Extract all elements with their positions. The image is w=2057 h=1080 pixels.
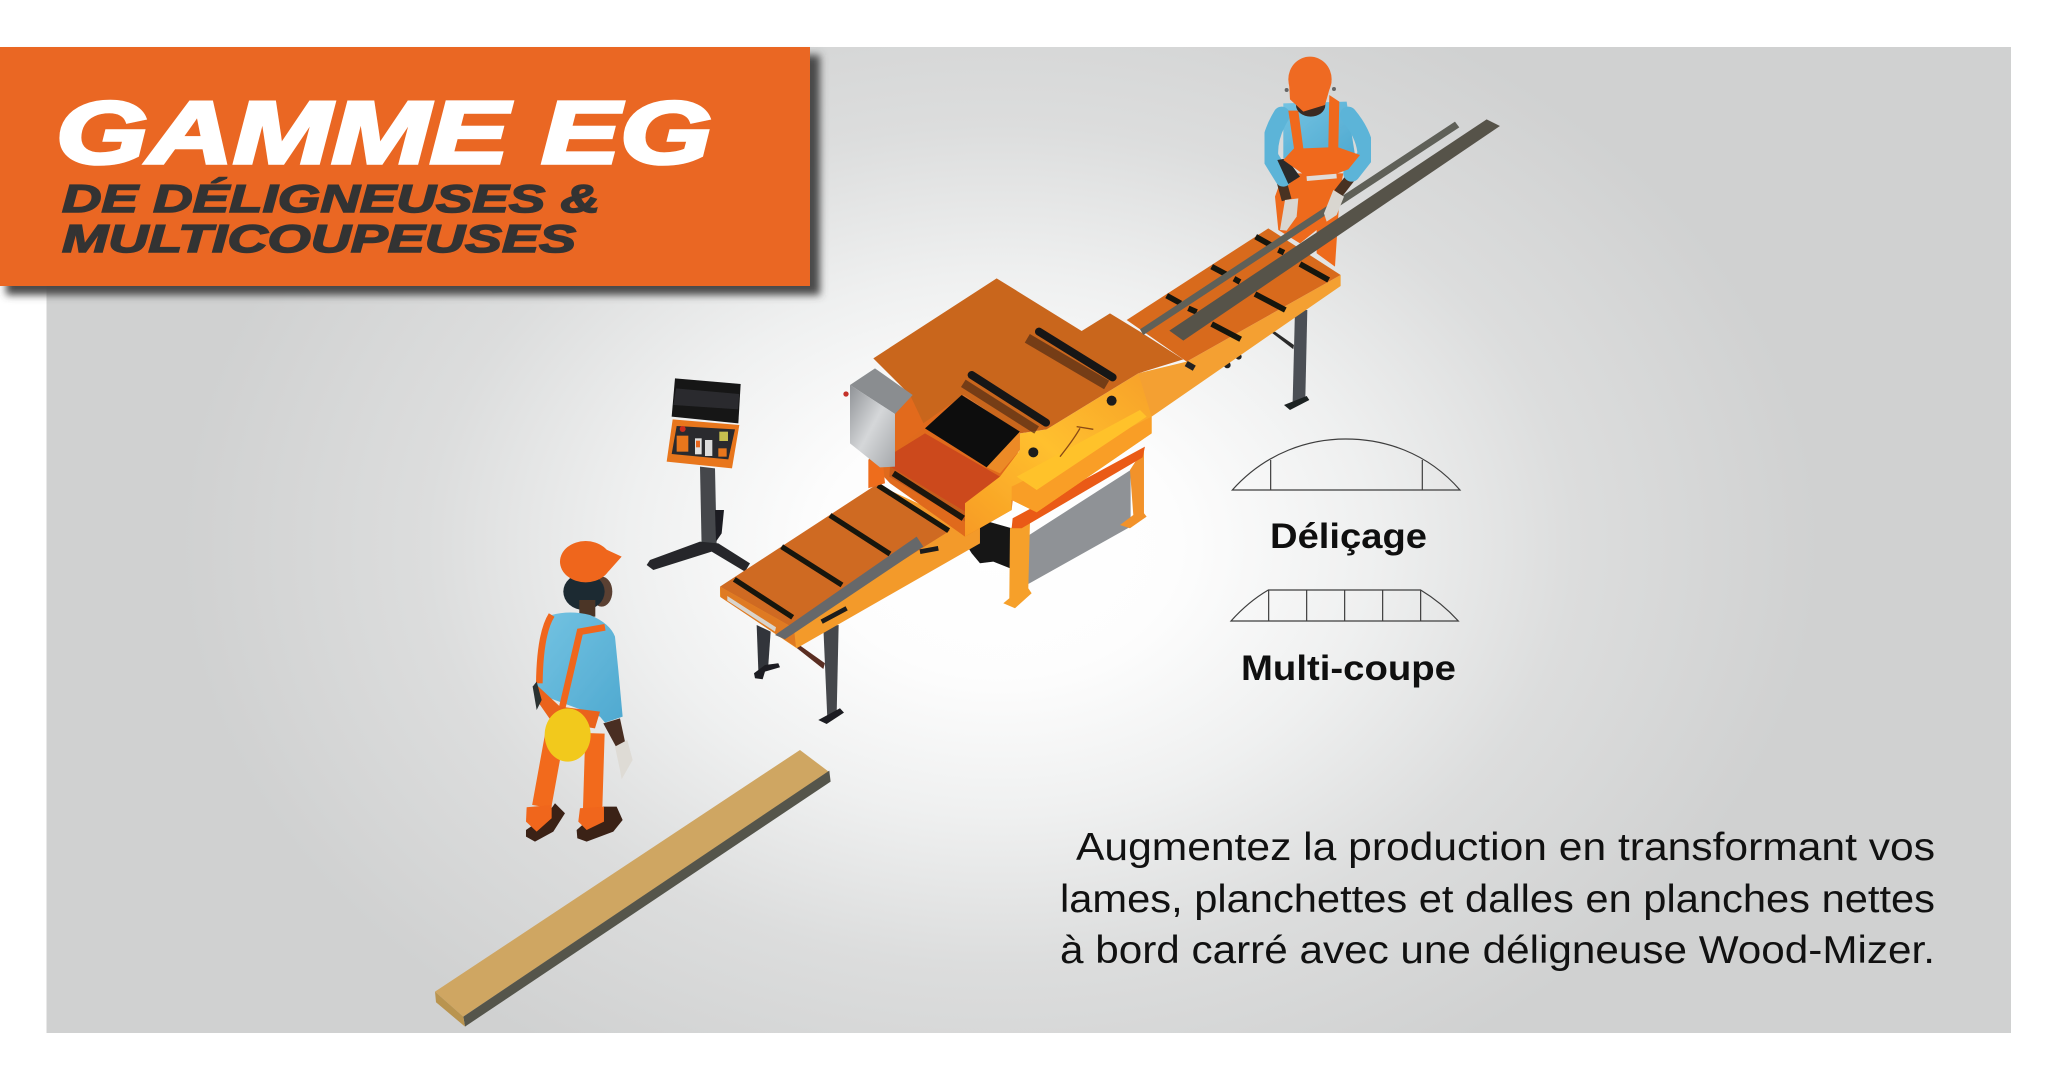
drawing: worker gloves [1280, 190, 1344, 231]
drawing: saw machine body [843, 278, 1183, 537]
drawing: worker standing with yellow helmet [526, 541, 633, 842]
text block: description: lames, planchettes et dalles en planches nettes [1060, 878, 1935, 921]
drawing: waste board on outfeed [775, 537, 923, 639]
drawing: blue torso [1283, 102, 1355, 158]
drawing: dark belt [1277, 158, 1300, 184]
drawing: orange cap [560, 541, 622, 582]
drawing: worker legs at infeed [1275, 173, 1343, 267]
drawing: worker feeding boards [1270, 57, 1366, 200]
drawing: orange bib [1283, 95, 1360, 177]
drawing: infeed table deck [1127, 228, 1341, 417]
subheading: line one: DE DÉLIGNEUSES & [62, 177, 600, 221]
heading: GAMME EG: GAMME EG [56, 83, 712, 182]
text block: description: à bord carré avec une déligneuse Wood-Mizer. [1060, 929, 1935, 972]
drawing: chute opening [890, 395, 925, 455]
drawing: suspenders [539, 615, 605, 710]
drawing: blue shirt [537, 612, 623, 723]
drawing: yellow hard hat [545, 708, 591, 762]
drawing: red beam [1012, 447, 1145, 528]
label: Multi-coupe: Multi-coupe [1241, 649, 1456, 688]
drawing: outfeed table legs [754, 625, 844, 724]
drawing: boards being fed [1140, 119, 1500, 341]
drawing: hand and glove [603, 718, 625, 747]
drawing: belt [535, 683, 600, 728]
diagram: multi-rip cut [1231, 590, 1458, 621]
drawing: orange backing [868, 395, 1020, 537]
drawing: lower left post [868, 460, 885, 488]
drawing: machine base cabinet and motor [963, 447, 1147, 608]
drawing: bolts [1028, 396, 1117, 457]
drawing: legs [542, 733, 595, 808]
drawing: forearms [1282, 178, 1350, 200]
drawing: front post [1003, 522, 1032, 608]
drawing: lower feed roller [963, 383, 1037, 430]
drawing: silver electrical box [843, 368, 913, 467]
subheading: line two: MULTICOUPEUSES [62, 218, 576, 261]
drawing: infeed table legs [1224, 310, 1309, 410]
drawing: grey door panel [1027, 470, 1131, 584]
label: Déliçage: Déliçage [1270, 517, 1427, 556]
drawing: plank on floor [435, 750, 831, 1027]
drawing: yellow side frame [965, 373, 1152, 537]
drawing: control console on stand [647, 378, 750, 572]
drawing: hair and head [591, 577, 612, 607]
title banner [0, 47, 810, 286]
drawing: top plate [873, 278, 1183, 433]
drawing: cut lines on blade cover [1060, 427, 1093, 457]
drawing: upper feed roller [1027, 338, 1107, 385]
diagram: edging cut [1232, 439, 1460, 490]
icon: motor [963, 522, 1012, 568]
drawing: head [1296, 93, 1325, 117]
drawing: outfeed table deck [720, 484, 980, 648]
drawing: lower red chamber [890, 433, 1000, 512]
banner shadow [6, 55, 820, 295]
drawing: orange cap [1288, 57, 1332, 112]
text block: description: Augmentez la production en transformant vos [1076, 826, 1935, 869]
drawing: rear post [1120, 448, 1147, 528]
text block: description [1060, 826, 1935, 972]
drawing: boots [526, 803, 565, 842]
drawing: blue arms [1270, 115, 1366, 178]
